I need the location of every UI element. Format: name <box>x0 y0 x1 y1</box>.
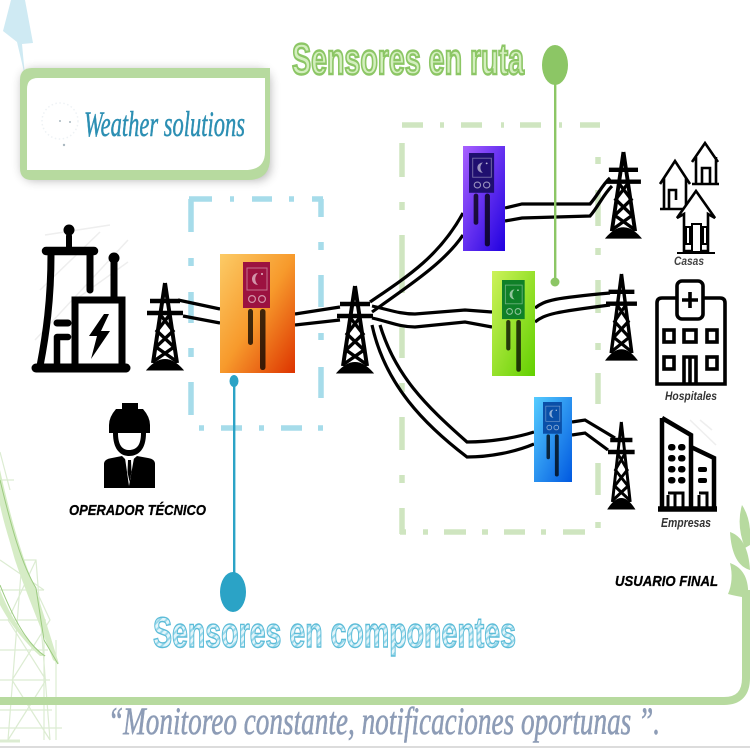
icon: logo dots globe <box>42 103 78 146</box>
label: usuario final: USUARIO FINAL <box>615 574 718 590</box>
dashed frame: sensores en componentes <box>189 199 323 428</box>
label: casas: Casas <box>674 254 704 268</box>
icon: office buildings <box>658 418 717 509</box>
label: operador tecnico: OPERADOR TÉCNICO <box>69 502 206 519</box>
icon: technical operator <box>104 403 155 488</box>
icon: houses <box>660 143 719 253</box>
icon: leaves <box>728 505 750 598</box>
heading: sensores en componentes: Sensores en componentes <box>153 609 516 657</box>
power lines <box>178 178 615 457</box>
heading: sensores en ruta: Sensores en ruta <box>292 35 524 84</box>
sensor: green <box>492 271 535 376</box>
panel border: bottom and right frame <box>0 590 746 701</box>
icon: tower 5 <box>608 422 635 509</box>
callout: blue pin <box>220 375 246 612</box>
icon: tower 2 <box>337 286 373 373</box>
sensor: purple <box>463 146 505 251</box>
label: hospitales: Hospitales <box>665 389 717 403</box>
label: empresas: Empresas <box>661 516 711 530</box>
sensor: orange <box>220 254 295 373</box>
icon: lightning bolt <box>3 0 33 76</box>
icon: hospital <box>657 281 725 384</box>
logo text: Weather solutions <box>84 104 245 144</box>
icon: power plant <box>35 224 128 368</box>
callout: green pin <box>542 45 568 286</box>
icon: tower 1 <box>147 283 183 370</box>
icon: tower 3 <box>606 152 641 238</box>
sensor: blue <box>534 397 572 482</box>
icon: tower 4 <box>606 274 637 360</box>
footer rule <box>0 746 750 748</box>
watermark: faint tower with power lines <box>0 452 62 741</box>
panel: logo <box>20 68 270 180</box>
dashed frame: sensores en ruta <box>400 125 600 534</box>
